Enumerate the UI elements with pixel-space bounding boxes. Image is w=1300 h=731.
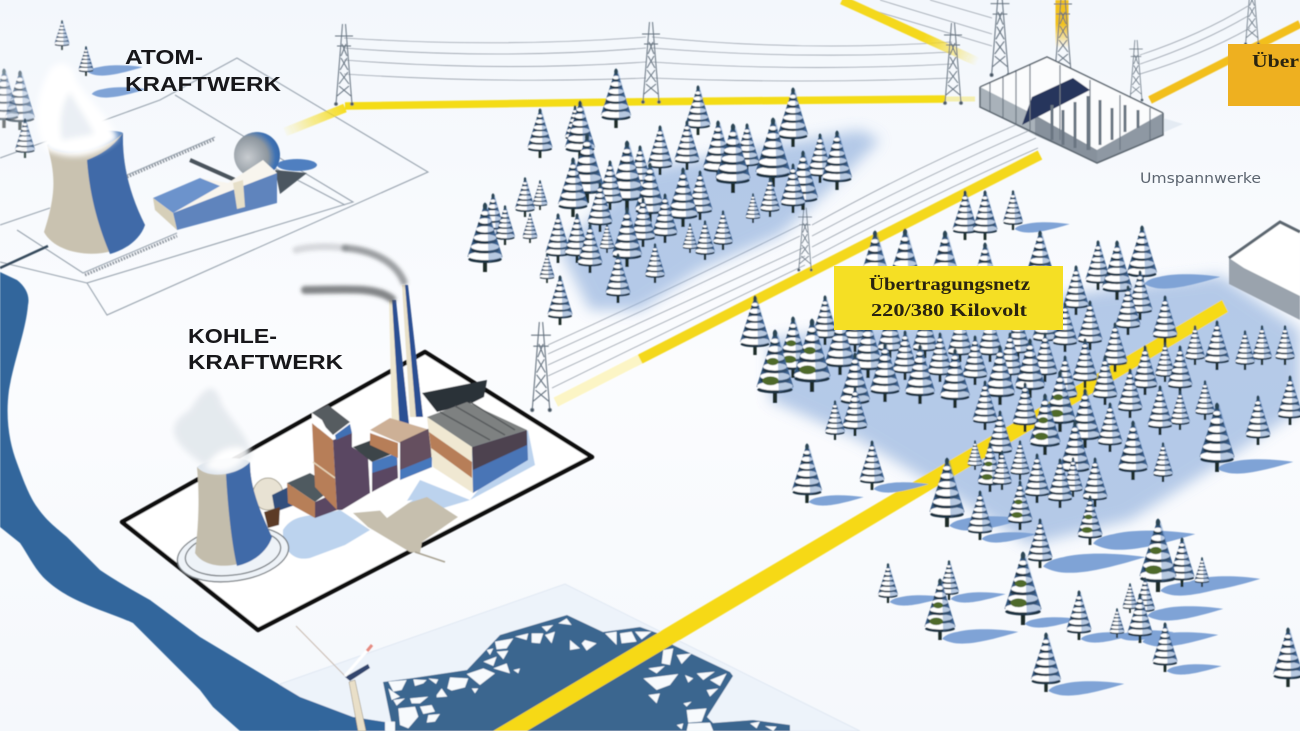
tree shadows south	[809, 222, 1293, 696]
reactor shadow	[275, 170, 307, 194]
power lines	[344, 0, 1250, 388]
callout: Übertragungsnetz: Übertragungsnetz	[869, 274, 1030, 294]
label: Atom-Kraftwerk: ATOM-	[125, 47, 203, 69]
callout: orange box top right: Über	[1252, 51, 1299, 71]
panel: frozen lake with ice floes	[383, 615, 790, 731]
reactor block	[153, 160, 277, 230]
cooling tower steam	[174, 389, 250, 472]
dark strip	[190, 160, 235, 180]
label: Kohle-Kraftwerk: KOHLE-	[188, 326, 277, 348]
trees beside cooling tower	[0, 20, 147, 158]
main boiler block	[422, 380, 528, 493]
panel: Umspannwerk 2	[1229, 222, 1300, 320]
label: Umspannwerke: Umspannwerke	[1140, 171, 1261, 187]
stacks	[389, 285, 423, 433]
panel: Atomkraftwerk site	[0, 20, 428, 315]
label: Kohle-Kraftwerk	[188, 326, 344, 374]
cooling tower rings	[174, 519, 292, 589]
snow mound around lake	[280, 584, 860, 731]
site outline	[0, 58, 428, 315]
forest south of the line	[740, 190, 1300, 692]
label: Atom-Kraftwerk	[125, 47, 282, 96]
cooling tower	[44, 131, 145, 254]
hatched tracks	[85, 139, 215, 275]
panel: Umspannwerk 1	[980, 57, 1183, 163]
icon: wind turbine	[296, 626, 372, 731]
tall block	[312, 405, 370, 510]
forest shadow blobs	[560, 130, 1300, 545]
steam	[37, 64, 118, 156]
stack base block	[370, 418, 432, 480]
cooling tower	[195, 458, 272, 566]
chimney smoke	[296, 247, 404, 299]
callout: Übertragungsnetz	[834, 266, 1063, 330]
small block	[287, 473, 337, 518]
label: Kohle-Kraftwerk: KRAFTWERK	[188, 352, 344, 374]
forest north of the line	[468, 68, 852, 325]
icon: pylons	[335, 0, 1260, 412]
yellow transmission lines	[285, 0, 1300, 731]
site outline	[122, 352, 592, 630]
coal yard	[353, 497, 458, 562]
reactor dome	[234, 132, 280, 178]
connecting gear	[253, 478, 295, 528]
label: Atom-Kraftwerk: KRAFTWERK	[125, 74, 282, 96]
callout: Übertragungsnetz: 220/380 Kilovolt	[871, 300, 1027, 320]
panel: Kohlekraftwerk site	[122, 247, 592, 630]
river	[0, 272, 385, 731]
middle block	[353, 438, 398, 492]
callout: orange box top right	[1228, 44, 1300, 106]
building shadow	[283, 430, 535, 559]
